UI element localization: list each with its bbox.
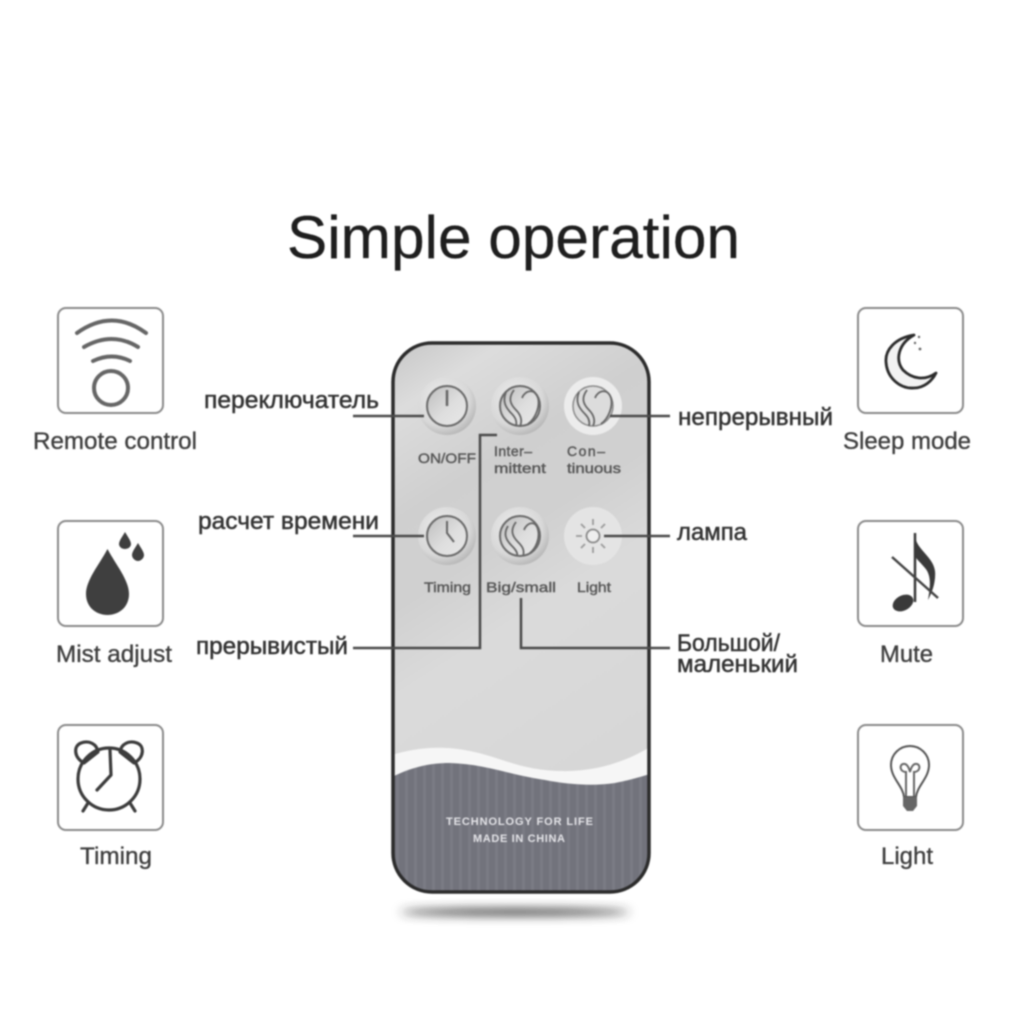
callout label: intermittent: прерывистый: [196, 633, 348, 660]
callout label: time setting: расчет времени: [198, 508, 379, 535]
button: on/off: [418, 377, 476, 435]
label: mute: Mute: [880, 641, 933, 668]
remote footer text: MADE IN CHINA: [473, 833, 565, 845]
icon: signal: [77, 320, 146, 405]
icon: moon: [886, 335, 936, 388]
feature: mute: [858, 521, 963, 668]
button label: on/off: ON/OFF: [418, 450, 476, 466]
panel: remote control device: [392, 342, 650, 916]
feature: mist adjust: [56, 521, 172, 668]
feature: sleep mode: [843, 308, 971, 455]
button label: big/small: Big/small: [486, 579, 556, 595]
label: mist adjust: Mist adjust: [56, 641, 172, 668]
label: remote control: Remote control: [33, 428, 197, 455]
remote shadow: [400, 908, 630, 916]
feature: remote control: [33, 308, 197, 455]
remote body: [392, 342, 650, 893]
remote footer text: [446, 816, 593, 845]
remote footer text: TECHNOLOGY FOR LIFE: [446, 816, 593, 828]
button label: continuous: Con–: [567, 443, 605, 459]
feature: light: [858, 725, 963, 870]
button label: intermittent: Inter–: [494, 443, 532, 459]
button: big/small: [491, 507, 549, 565]
button label: intermittent: mittent: [494, 460, 546, 476]
button: timing: [418, 507, 476, 565]
button label: continuous: tinuous: [567, 460, 621, 476]
callout label: lamp: лампа: [677, 519, 748, 546]
callout label: big/small: Большой/: [677, 630, 780, 657]
title: Simple operation: [287, 204, 740, 271]
label: sleep mode: Sleep mode: [843, 428, 971, 455]
icon: light bulb: [891, 746, 929, 811]
button label: light: Light: [577, 579, 611, 595]
label: timing: Timing: [80, 843, 152, 870]
icon: water drops: [86, 532, 144, 615]
icon: crossed note: [890, 533, 938, 615]
button: continuous: [564, 377, 622, 435]
button: intermittent: [491, 377, 549, 435]
button: light: [564, 507, 622, 565]
callout lines: [353, 416, 670, 648]
callout label: continuous: непрерывный: [678, 404, 833, 431]
button label: timing: Timing: [424, 579, 471, 595]
label: light: Light: [881, 843, 933, 870]
callout label: big/small: маленький: [677, 651, 798, 678]
icon: alarm clock: [76, 742, 142, 811]
feature: timing: [58, 725, 163, 870]
callout label: switch: переключатель: [204, 387, 379, 414]
